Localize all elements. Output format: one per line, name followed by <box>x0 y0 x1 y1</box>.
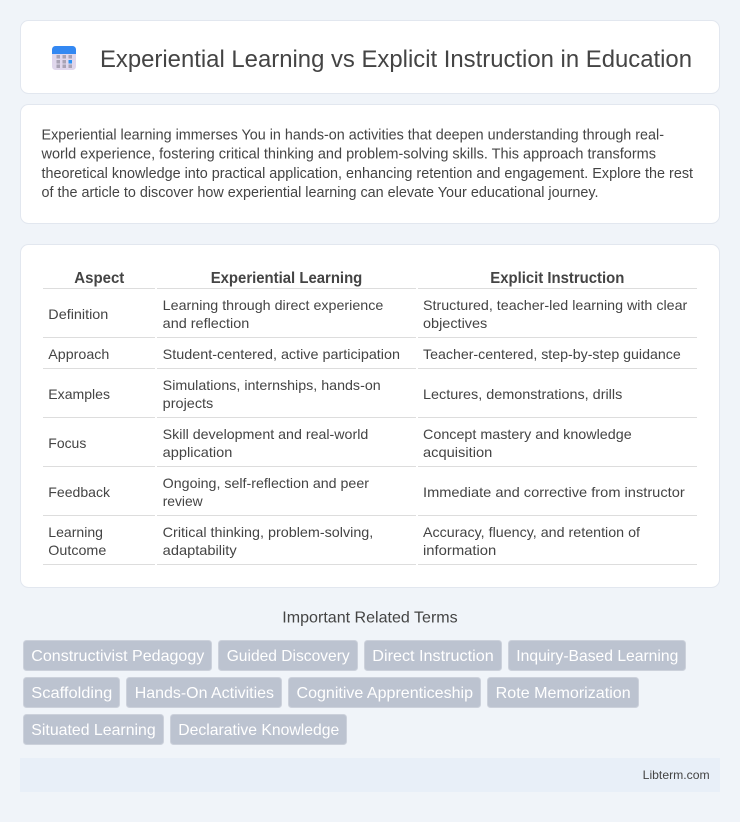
tag: Scaffolding: Scaffolding <box>31 685 112 702</box>
row: focus <box>48 426 632 460</box>
row: learning outcome: Critical thinking, problem-solving, <box>163 524 373 540</box>
row: approach: Approach <box>48 346 109 362</box>
row: definition: objectives <box>423 315 487 331</box>
row: examples: Examples <box>48 386 110 402</box>
tag: Inquiry-Based Learning <box>508 640 686 670</box>
row: definition: Structured, teacher-led learning with clear <box>423 297 688 313</box>
tag: Guided Discovery: Guided Discovery <box>227 648 350 665</box>
row: learning outcome <box>48 524 640 558</box>
row: learning outcome: Learning <box>48 524 103 540</box>
tag: Constructivist Pedagogy: Constructivist Pedagogy <box>31 648 204 665</box>
tag: Scaffolding <box>24 678 120 708</box>
tag: Situated Learning <box>24 714 164 744</box>
tag: Direct Instruction: Direct Instruction <box>372 648 494 665</box>
title: Experiential Learning vs Explicit Instruction in Education <box>100 46 692 73</box>
row: definition <box>48 297 688 331</box>
row: focus: Skill development and real-world <box>163 426 368 442</box>
table header row: Experiential Learning <box>211 270 362 287</box>
row: examples: projects <box>163 395 213 411</box>
intro text block: Experiential learning immerses You in hands-on activities that deepen understanding through real- <box>42 128 664 144</box>
footer <box>20 758 720 792</box>
related term tags <box>24 640 686 744</box>
intro text block: of the article to discover how experiential learning can elevate Your educational journey. <box>42 185 598 201</box>
row: definition: Learning through direct experience <box>163 297 384 313</box>
panel: comparison table <box>20 244 720 588</box>
row: focus: Focus <box>48 435 86 451</box>
row: focus: Concept mastery and knowledge <box>423 426 632 442</box>
row: learning outcome: adaptability <box>163 542 237 558</box>
intro text block <box>40 128 693 201</box>
tag: Cognitive Apprenticeship: Cognitive Apprenticeship <box>296 685 473 702</box>
row: examples: Simulations, internships, hands-on <box>163 377 381 393</box>
row: examples <box>48 377 622 411</box>
panel: header <box>20 20 720 94</box>
tag: Inquiry-Based Learning: Inquiry-Based Learning <box>516 648 678 665</box>
table header row: Aspect <box>74 270 125 287</box>
row: approach <box>48 346 681 362</box>
row: approach: Teacher-centered, step-by-step guidance <box>423 346 681 362</box>
tag: Declarative Knowledge: Declarative Knowledge <box>178 722 339 739</box>
intro text block: world experience, fostering critical thinking and problem-solving skills. This approach transforms <box>40 146 656 162</box>
row: feedback: Ongoing, self-reflection and peer <box>163 475 369 491</box>
row: feedback: Feedback <box>48 484 111 500</box>
tag: Direct Instruction <box>364 640 502 670</box>
footer source text: Libterm.com <box>643 768 710 782</box>
row: approach: Student-centered, active participation <box>163 346 400 362</box>
tag: Situated Learning: Situated Learning <box>31 722 156 739</box>
row: learning outcome: information <box>423 542 496 558</box>
tag: Guided Discovery <box>218 640 358 670</box>
row: definition: Definition <box>48 306 108 322</box>
tag: Cognitive Apprenticeship <box>288 678 480 708</box>
row: feedback: review <box>163 493 204 509</box>
icon: calendar <box>52 46 76 70</box>
tag: Declarative Knowledge <box>170 714 346 744</box>
tag: Hands-On Activities: Hands-On Activities <box>135 685 274 702</box>
table header row <box>74 270 624 287</box>
row: definition: and reflection <box>163 315 249 331</box>
tag: Hands-On Activities <box>126 678 282 708</box>
tag: Rote Memorization <box>488 678 638 708</box>
tag: Constructivist Pedagogy <box>24 640 212 670</box>
table header row: Explicit Instruction <box>490 270 624 287</box>
row: feedback: Immediate and corrective from instructor <box>423 484 685 500</box>
row: learning outcome: Outcome <box>48 542 107 558</box>
row: focus: application <box>163 444 232 460</box>
tag: Rote Memorization: Rote Memorization <box>496 685 631 702</box>
row: examples: Lectures, demonstrations, drills <box>423 386 622 402</box>
heading: related terms: Important Related Terms <box>282 610 458 626</box>
row: learning outcome: Accuracy, fluency, and retention of <box>423 524 640 540</box>
row: feedback <box>48 475 685 509</box>
intro text block: theoretical knowledge into practical application, enhancing retention and engagement. Explore the rest <box>42 166 693 182</box>
panel: introduction <box>20 104 720 224</box>
row: focus: acquisition <box>423 444 492 460</box>
